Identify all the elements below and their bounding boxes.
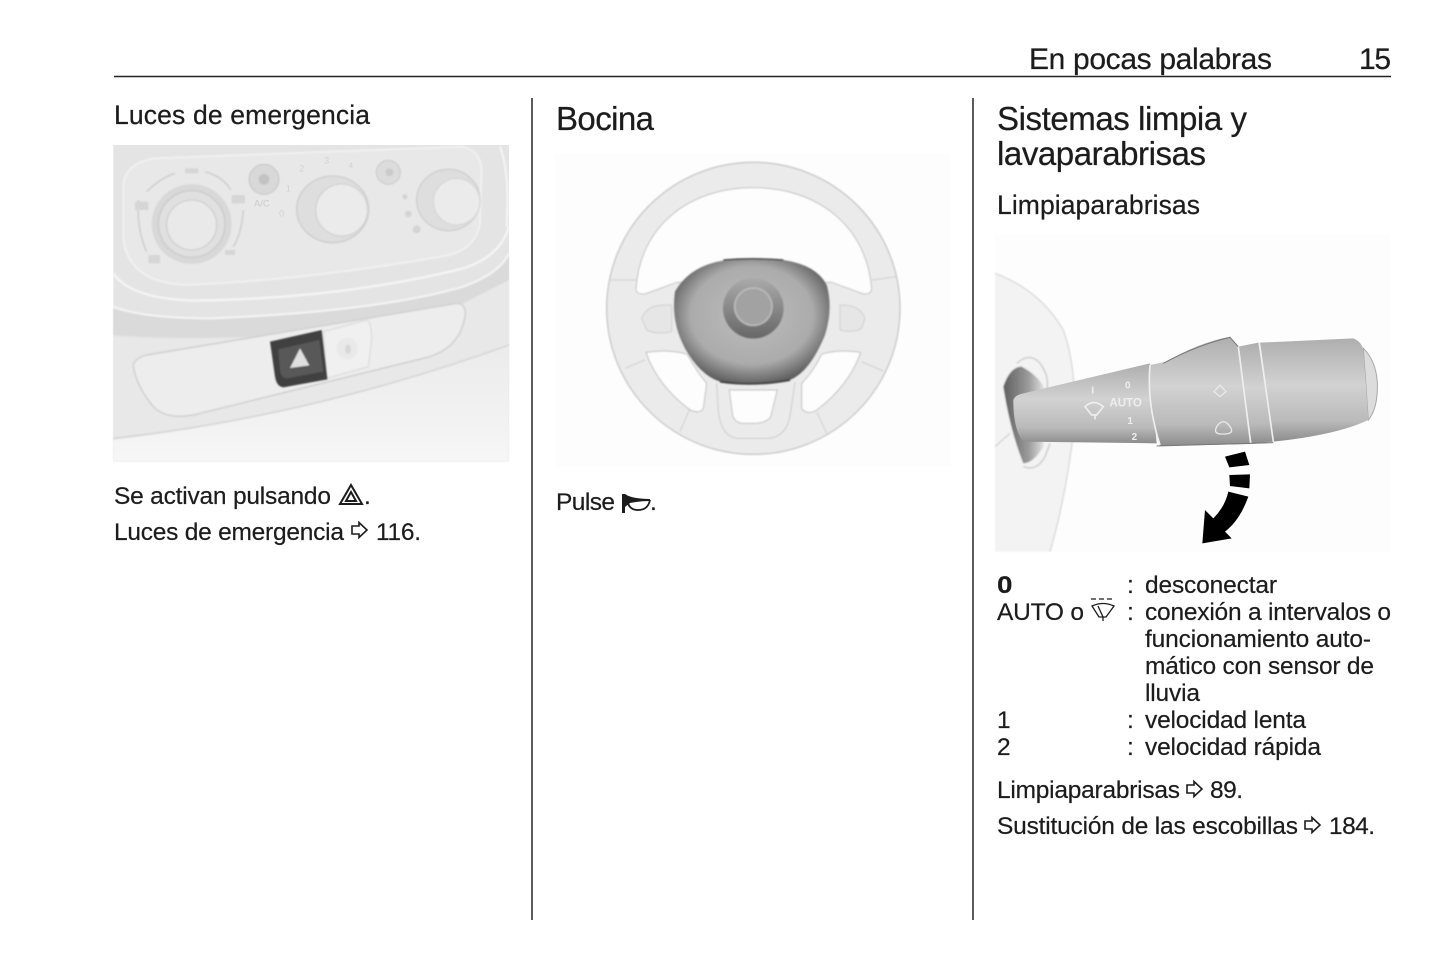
legend table: velocidad lenta — [1145, 707, 1306, 734]
icon: hazard triangle — [340, 485, 362, 504]
text: wiper cross reference: Limpiaparabrisas — [997, 777, 1180, 804]
lever: 1 — [1127, 416, 1133, 427]
legend table: desconectar — [1145, 572, 1277, 599]
legend table: velocidad rápida — [1145, 734, 1321, 761]
legend table: mático con sensor de — [1145, 653, 1374, 680]
illustration: dashboard with hazard button: 2 — [299, 164, 304, 174]
legend table: 2 — [997, 734, 1011, 761]
icon: hazard button — [270, 330, 327, 387]
illustration: dashboard with hazard button: A/C — [254, 199, 270, 209]
icon: interval wiper — [1091, 599, 1114, 621]
text: pulse horn: Pulse — [556, 489, 615, 516]
heading: lavaparabrisas — [997, 135, 1206, 172]
icon: reference arrow — [352, 522, 367, 538]
lever: 2 — [1132, 432, 1138, 443]
text: cross reference: 116. — [376, 519, 421, 546]
heading: Sistemas limpia y — [997, 100, 1248, 137]
legend table: 0 — [997, 572, 1012, 599]
section title: En pocas palabras — [1029, 43, 1272, 76]
column: sistemas limpia y lavaparabrisas — [995, 100, 1391, 840]
heading — [997, 100, 1248, 172]
airbag horn pad — [674, 259, 830, 384]
illustration: dashboard with hazard button: 4 — [348, 160, 353, 170]
legend table: lluvia — [1145, 680, 1200, 707]
text: wiper cross reference: 89. — [1210, 777, 1243, 804]
text: pulse horn: . — [650, 489, 657, 516]
text: blades cross reference: 184. — [1329, 813, 1375, 840]
text: blades cross reference: Sustitución de las escobillas — [997, 813, 1298, 840]
legend table: AUTO o — [997, 599, 1084, 626]
illustration: dashboard with hazard button: 0 — [279, 209, 284, 219]
heading: Bocina — [556, 100, 655, 137]
lever: 0 — [1125, 380, 1131, 391]
lever: AUTO — [1109, 397, 1142, 410]
legend table — [997, 572, 1391, 761]
column: luces de emergencia — [113, 100, 509, 546]
illustration: dashboard with hazard button: 3 — [324, 155, 329, 165]
page header — [114, 43, 1391, 76]
heading: Luces de emergencia — [114, 100, 370, 130]
legend table: : — [1127, 734, 1134, 761]
lever — [1013, 337, 1377, 446]
page number: 15 — [1359, 43, 1391, 76]
legend table: 1 — [997, 707, 1011, 734]
illustration: steering wheel — [605, 161, 902, 456]
column: bocina — [555, 100, 950, 516]
legend table: : — [1127, 599, 1134, 626]
icon: horn — [622, 494, 650, 513]
arrow: push down — [1202, 452, 1250, 543]
legend table: funcionamiento auto- — [1145, 626, 1371, 653]
illustration: dashboard with hazard button: 1 — [286, 184, 291, 194]
text: pulse horn — [556, 489, 657, 516]
subheading: Limpiaparabrisas — [997, 190, 1200, 220]
legend table: conexión a intervalos o — [1145, 599, 1391, 626]
text: cross reference: Luces de emergencia — [114, 519, 344, 546]
legend table: : — [1127, 707, 1134, 734]
illustration: dashboard with hazard button — [112, 145, 510, 462]
legend table: : — [1127, 572, 1134, 599]
text: activation: . — [364, 483, 371, 510]
illustration: wiper stalk — [994, 272, 1378, 552]
text: activation: Se activan pulsando — [114, 483, 331, 510]
